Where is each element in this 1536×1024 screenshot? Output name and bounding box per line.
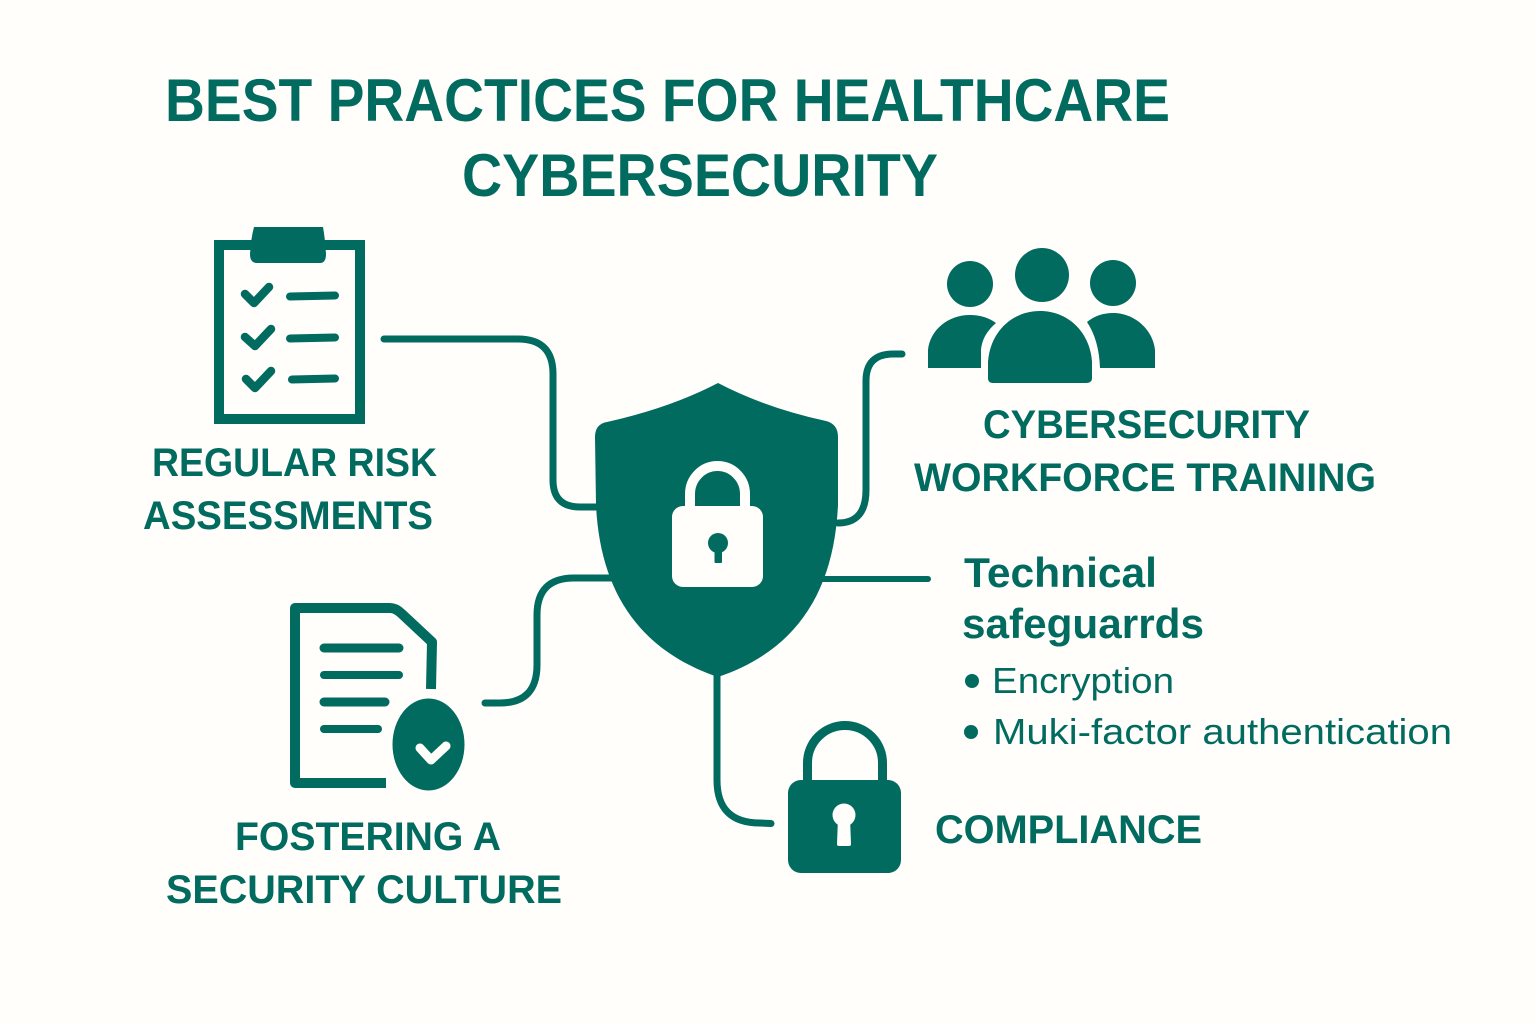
label: regular risk assessments: ASSESSMENTS (143, 494, 433, 538)
icon: clipboard checklist (219, 227, 360, 419)
label: compliance: COMPLIANCE (935, 808, 1202, 852)
icon: document with shield badge (295, 608, 464, 790)
icon: central shield with padlock (595, 383, 838, 677)
icon: compliance padlock (788, 726, 901, 873)
label: fostering a security culture: SECURITY CULTURE (166, 868, 562, 912)
heading: technical safeguards (962, 549, 1204, 647)
arrow: risk assessments connector (384, 339, 600, 507)
arrow: technical safeguards connector (820, 576, 928, 582)
label: cybersecurity workforce training (914, 403, 1376, 500)
arrow: security culture connector (485, 578, 615, 703)
arrow: compliance connector (717, 675, 771, 824)
label: fostering a security culture (166, 815, 562, 912)
title: CYBERSECURITY (462, 142, 938, 209)
arrow: workforce training connector (838, 354, 902, 523)
bullet: multi-factor authentication: Muki-factor authentication (993, 711, 1452, 752)
icon: workforce group of people (928, 248, 1155, 383)
title: BEST PRACTICES FOR HEALTHCARE (165, 67, 1170, 134)
label: fostering a security culture: FOSTERING A (235, 815, 501, 859)
label: cybersecurity workforce training: WORKFORCE TRAINING (914, 456, 1376, 500)
label: regular risk assessments: REGULAR RISK (152, 441, 437, 485)
title (165, 67, 1170, 209)
label: regular risk assessments (143, 441, 437, 538)
heading: technical safeguards: safeguarrds (962, 600, 1204, 647)
label: cybersecurity workforce training: CYBERSECURITY (983, 403, 1310, 447)
text block: technical safeguards (962, 549, 1452, 752)
heading: technical safeguards: Technical (964, 549, 1157, 596)
bullet: encryption: Encryption (992, 660, 1174, 701)
